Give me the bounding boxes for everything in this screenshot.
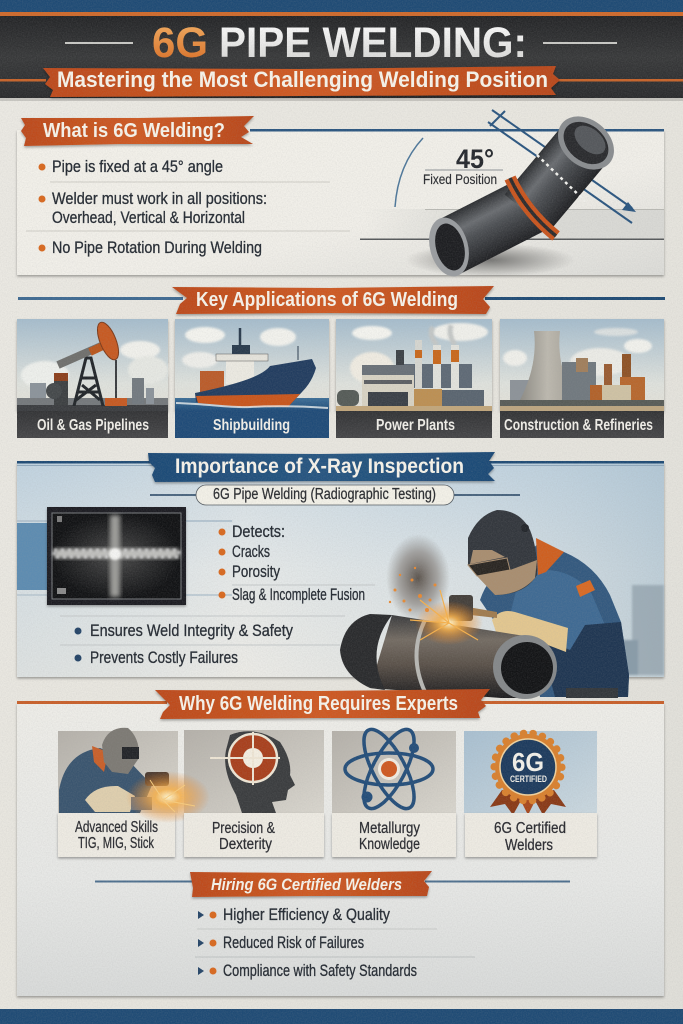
panel: why experts — [17, 701, 664, 996]
heading ribbon — [148, 452, 495, 482]
caption: precision — [184, 813, 324, 857]
heading ribbon: Importance of X-Ray Inspection — [175, 455, 464, 478]
detects list: Detects: — [232, 523, 285, 541]
icon: welder at work — [59, 728, 169, 813]
bullet list: Welder must work in all positions: — [52, 190, 267, 208]
hiring benefit list: Higher Efficiency & Quality — [223, 906, 391, 924]
hiring benefit list: Compliance with Safety Standards — [223, 962, 417, 980]
icon: certified badge — [490, 733, 566, 815]
benefits list: Ensures Weld Integrity & Safety — [90, 622, 294, 640]
hiring benefit list — [195, 906, 475, 980]
icon: certified badge: CERTIFIED — [510, 774, 547, 784]
caption: metallurgy: Knowledge — [359, 836, 420, 853]
top blue band — [0, 0, 683, 13]
detects list: Slag & Incomplete Fusion — [232, 586, 365, 604]
section heading: key applications: Key Applications of 6G Welding — [196, 289, 458, 311]
detects list — [218, 523, 375, 604]
caption: oil and gas — [17, 411, 168, 438]
caption: advanced skills — [58, 813, 175, 857]
detects list: Porosity — [232, 563, 281, 581]
bullet list: No Pipe Rotation During Welding — [52, 239, 262, 257]
icon: power plant — [336, 325, 492, 411]
section heading: why experts: Why 6G Welding Requires Experts — [179, 693, 458, 715]
icon: pumpjack — [46, 319, 127, 406]
card: metallurgy — [332, 723, 456, 815]
heading: hiring 6G certified welders — [95, 871, 570, 897]
card: precision — [184, 730, 324, 813]
title: 6G — [152, 19, 208, 67]
card: oil and gas pipelines — [17, 319, 168, 411]
card: shipbuilding — [175, 319, 329, 411]
panel: what is 6G welding — [17, 105, 664, 281]
x-ray monitor — [47, 507, 186, 605]
bullet list: Overhead, Vertical & Horizontal — [52, 209, 245, 227]
section heading: why experts — [155, 689, 490, 719]
arrow lines — [488, 110, 636, 223]
caption: advanced skills: Advanced Skills — [75, 819, 158, 836]
heading ribbon — [21, 116, 254, 146]
big pipe — [340, 614, 618, 699]
caption: power plants — [336, 411, 492, 438]
subtitle text: Mastering the Most Challenging Welding Position — [57, 67, 548, 92]
panel: x-ray inspection — [17, 452, 664, 699]
card: power plants — [336, 319, 492, 411]
angle label: Fixed Position — [423, 172, 497, 187]
subtitle pill — [150, 485, 520, 505]
subtitle ribbon — [43, 66, 560, 97]
card: advanced skills — [58, 728, 178, 813]
caption: metallurgy — [332, 813, 456, 857]
benefits list: Prevents Costly Failures — [90, 649, 238, 667]
subtitle pill: 6G Pipe Welding (Radiographic Testing) — [213, 486, 436, 503]
caption: construction and refineries — [500, 411, 664, 438]
skyline — [618, 585, 664, 675]
bullet list: Pipe is fixed at a 45° angle — [52, 158, 223, 176]
bottom blue band — [0, 1009, 683, 1024]
caption: precision: Dexterity — [219, 836, 272, 853]
caption: certified — [465, 813, 597, 857]
welder illustration — [449, 510, 629, 697]
header banner — [0, 12, 683, 101]
angle label — [395, 138, 503, 207]
bullet list — [38, 158, 267, 257]
title: PIPE WELDING: — [219, 19, 527, 67]
heading: hiring 6G certified welders: Hiring 6G Certified Welders — [211, 875, 402, 894]
icon: head with target — [210, 731, 295, 813]
icon: ship — [176, 328, 328, 408]
glove — [492, 611, 568, 652]
caption: power plants: Power Plants — [376, 417, 455, 434]
caption: shipbuilding — [175, 411, 329, 438]
heading ribbon: What is 6G Welding? — [43, 120, 225, 142]
card: certified — [464, 731, 597, 815]
icon: pipe elbow — [423, 105, 625, 281]
caption: certified: 6G Certified — [494, 820, 566, 837]
angle label: 45° — [456, 144, 494, 174]
sparks: welding glow — [126, 771, 210, 823]
caption: certified: Welders — [505, 837, 553, 854]
sparks — [389, 567, 483, 645]
card: construction and refineries — [500, 319, 664, 411]
icon: certified badge: 6G — [512, 747, 544, 777]
detects list: Cracks — [232, 543, 270, 561]
icon: cooling tower and refinery — [500, 331, 664, 411]
caption: precision: Precision & — [212, 820, 276, 837]
caption: shipbuilding: Shipbuilding — [213, 417, 290, 434]
smoke — [386, 534, 450, 622]
benefits list — [60, 616, 345, 667]
caption: oil and gas: Oil & Gas Pipelines — [37, 417, 149, 434]
caption: advanced skills: TIG, MIG, Stick — [78, 835, 154, 852]
caption: metallurgy: Metallurgy — [359, 820, 420, 837]
icon: atom — [345, 723, 433, 815]
hiring benefit list: Reduced Risk of Failures — [223, 934, 364, 952]
section heading: key applications — [18, 286, 665, 314]
